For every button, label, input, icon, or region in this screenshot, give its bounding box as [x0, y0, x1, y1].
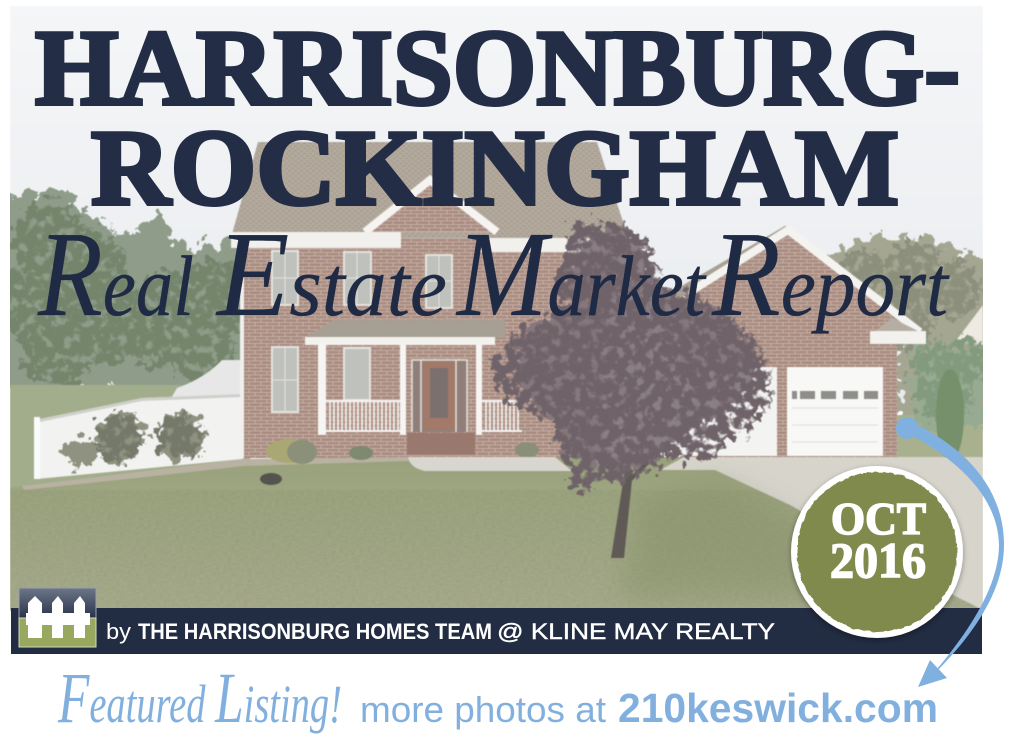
title: HARRISONBURG-	[35, 9, 960, 128]
main roof	[232, 142, 629, 240]
front walkway	[408, 457, 572, 471]
footer: featured listing caption: Featured Listing!	[57, 658, 342, 738]
cypress	[936, 369, 964, 461]
tree behind right gable	[825, 235, 995, 420]
subtitle: script heading: Real	[37, 207, 194, 342]
trees left of house	[0, 190, 255, 392]
mailbox	[260, 473, 282, 485]
title: ROCKINGHAM	[91, 109, 899, 228]
footer: featured listing caption: 210keswick.com	[618, 685, 938, 731]
subtitle: script heading	[37, 207, 950, 342]
panel: house photograph	[0, 6, 995, 611]
lawn shadow	[620, 480, 810, 600]
garage gable	[650, 230, 920, 458]
green trees right	[911, 338, 989, 430]
subtitle: script heading: Market	[455, 207, 707, 342]
banner byline: THE HARRISONBURG HOMES TEAM	[138, 619, 492, 644]
subtitle: script heading: Report	[711, 207, 950, 342]
date text	[830, 494, 926, 588]
front steps	[407, 433, 475, 455]
left lawn	[10, 385, 250, 490]
neighbour house corner	[955, 305, 983, 345]
driveway	[660, 457, 983, 610]
upper eave	[231, 232, 600, 458]
footer: featured listing caption: more photos at	[360, 689, 606, 730]
porch columns and railing	[318, 343, 522, 435]
house windows	[272, 251, 452, 412]
purple tree	[494, 221, 773, 558]
brick house wall	[243, 238, 603, 458]
porch roof	[305, 320, 505, 345]
date badge	[791, 466, 963, 638]
footer: featured listing caption	[57, 658, 938, 738]
front door	[412, 360, 467, 432]
garage dormer trim	[870, 318, 926, 344]
garage doors	[680, 367, 883, 456]
banner byline	[106, 619, 775, 644]
bottom banner	[11, 608, 982, 654]
title	[35, 9, 960, 228]
front lawn	[10, 457, 983, 611]
banner byline: @ KLINE MAY REALTY	[497, 619, 775, 644]
white fence	[34, 360, 243, 479]
arrow: from house to listing URL	[896, 417, 1004, 687]
subtitle: script heading: Estate	[215, 207, 447, 342]
banner byline: by	[106, 619, 131, 644]
foundation shrubs	[266, 439, 539, 464]
date text: OCT	[831, 494, 926, 544]
shrubs by fence	[62, 414, 204, 468]
garden bed edge	[22, 457, 410, 490]
date text: 2016	[830, 532, 926, 588]
sky	[10, 6, 983, 406]
right side lawn	[895, 415, 983, 460]
front gable	[360, 180, 497, 232]
icon: team logo with picket fence	[19, 588, 96, 647]
